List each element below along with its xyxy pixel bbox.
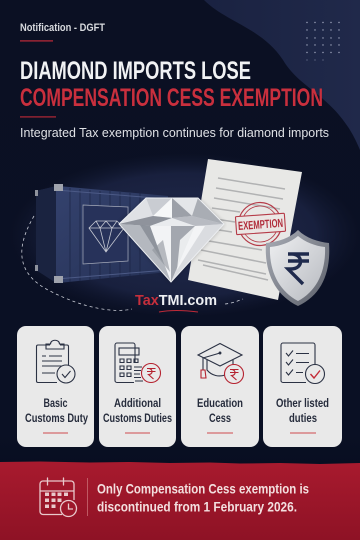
footer text (97, 482, 309, 514)
exemption stamp: EXEMPTION (238, 216, 283, 233)
title underline (20, 116, 56, 118)
card label: Basic (44, 396, 68, 410)
card label (276, 396, 329, 425)
dot grid decoration (306, 22, 340, 60)
title: DIAMOND IMPORTS LOSE (20, 57, 251, 85)
eyebrow: notification label: Notification - DGFT (20, 22, 105, 34)
container label panel (83, 205, 128, 264)
pavilion facets (119, 224, 171, 282)
card label: Cess (209, 411, 231, 425)
card: Education Cess (181, 326, 259, 447)
card label: Education (197, 396, 243, 410)
card: Other listed duties (263, 326, 342, 447)
card label: Additional (114, 396, 161, 410)
icon: clipboard with check (36, 340, 75, 383)
eyebrow underline (20, 40, 53, 42)
icon: calendar with clock (40, 478, 76, 516)
subtitle: Integrated Tax exemption continues for diamond imports (20, 125, 329, 140)
container diamond mark (89, 221, 124, 252)
card label: Customs Duties (103, 411, 172, 425)
card label: Customs Duty (25, 411, 88, 425)
rupee shield (266, 230, 329, 306)
icon: checklist with check (281, 343, 324, 384)
card label (103, 396, 172, 425)
rupee symbol (288, 254, 309, 284)
shipping container (35, 184, 168, 283)
card accent (290, 432, 316, 434)
brand logo: TaxTMI.com (135, 292, 217, 309)
card label (197, 396, 243, 425)
exemption stamp (235, 201, 286, 247)
card accent (125, 432, 150, 434)
icon: graduation cap with rupee coin (198, 344, 244, 384)
icon: calculator with rupee coin (115, 343, 160, 382)
document (188, 159, 302, 300)
world map glow (10, 153, 360, 317)
card: Additional Customs Duties (99, 326, 176, 447)
card label (25, 396, 88, 425)
card accent (43, 432, 68, 434)
card label: duties (289, 411, 317, 425)
card label: Other listed (276, 396, 329, 410)
card: Basic Customs Duty (17, 326, 94, 447)
footer divider (86, 478, 89, 516)
crown facets (146, 198, 172, 216)
diamond (119, 198, 224, 282)
dashed route (22, 216, 243, 310)
card accent (207, 432, 233, 434)
footer text: discontinued from 1 February 2026. (97, 500, 297, 514)
title (20, 57, 323, 112)
footer banner (0, 462, 360, 540)
hero illustration (10, 153, 360, 317)
footer text: Only Compensation Cess exemption is (97, 482, 309, 496)
